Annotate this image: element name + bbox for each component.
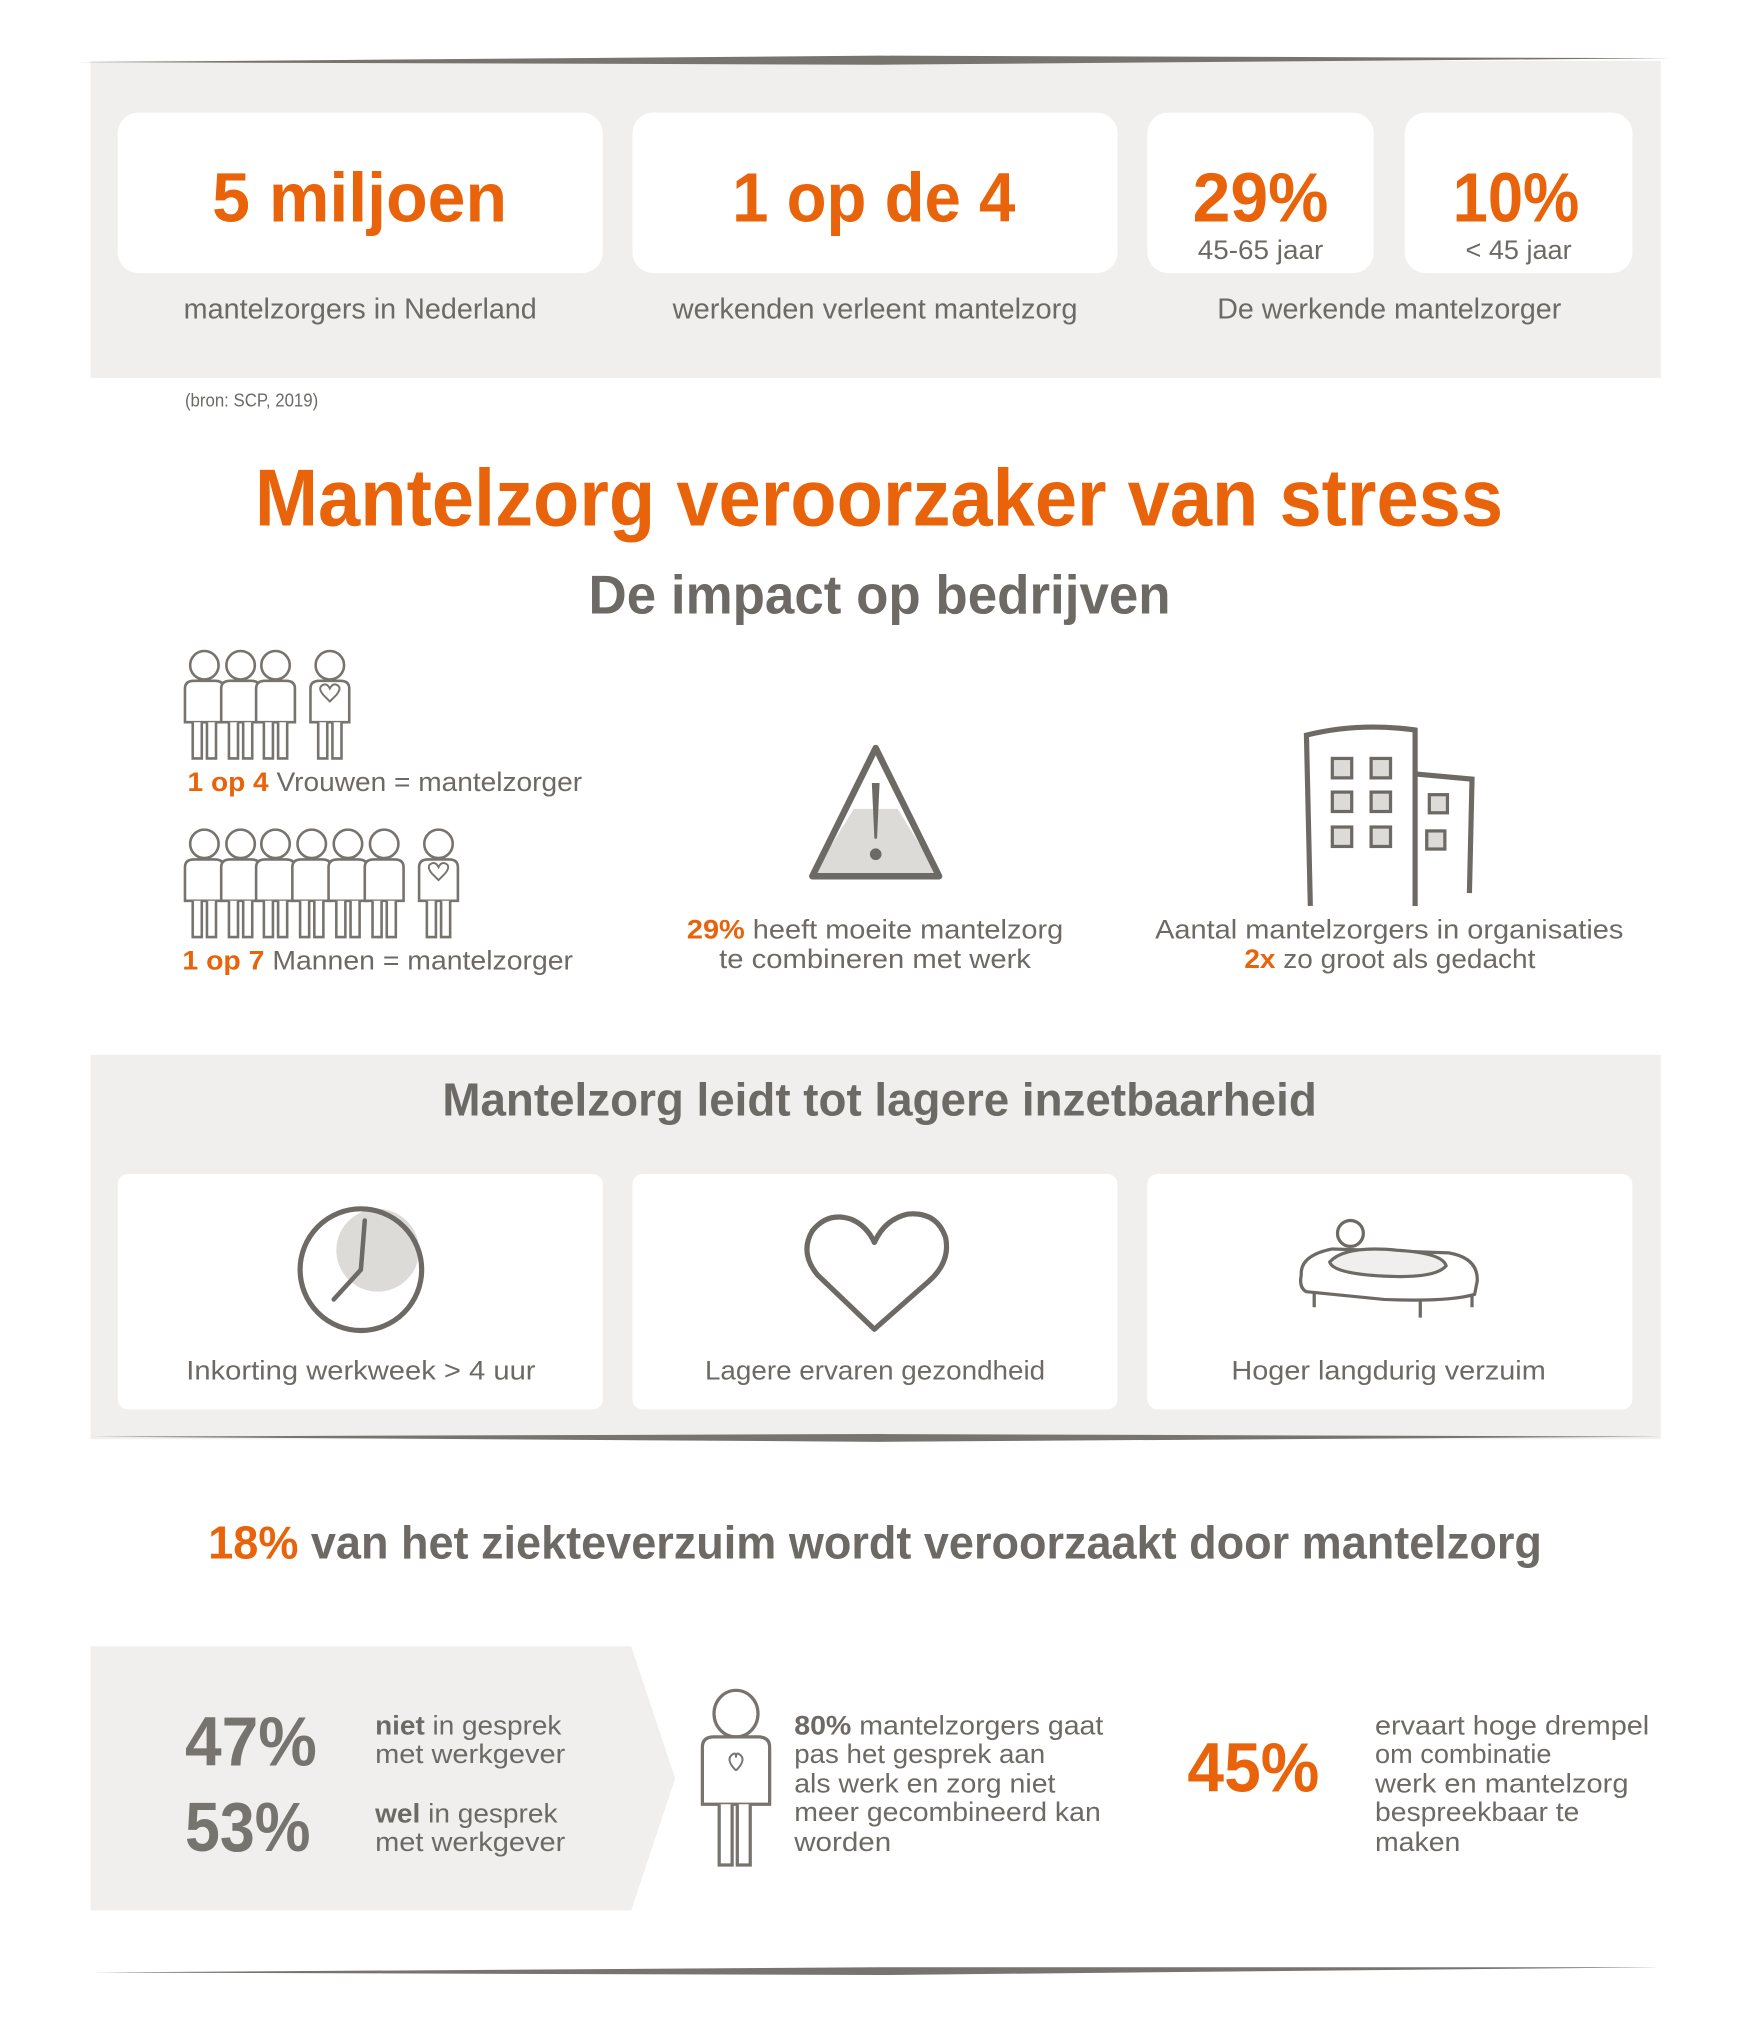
text: drempel: maken bbox=[1375, 1826, 1460, 1857]
panel: gesprek met werkgever: niet in gesprek bbox=[375, 1709, 562, 1740]
icon: person with heart bbox=[702, 1690, 770, 1865]
card: 5 miljoen bbox=[118, 113, 603, 273]
captions: mantelzorgers in Nederland bbox=[184, 293, 537, 325]
text: drempel: werk en mantelzorg bbox=[1374, 1768, 1629, 1799]
women group bbox=[185, 651, 582, 797]
card: 1 op de 4: 1 op de 4 bbox=[732, 158, 1016, 236]
card: 5 miljoen: 5 miljoen bbox=[212, 158, 507, 236]
captions: werkenden verleent mantelzorg bbox=[672, 293, 1077, 325]
card: 29%: 45-65 jaar bbox=[1198, 234, 1323, 265]
card: 1 op de 4 bbox=[633, 113, 1118, 273]
card: 10%: < 45 jaar bbox=[1466, 234, 1572, 265]
icon: warning triangle bbox=[812, 748, 939, 876]
card: gezondheid: Lagere ervaren gezondheid bbox=[705, 1355, 1045, 1386]
panel: gesprek met werkgever bbox=[91, 1646, 675, 1910]
text: 29% moeite bbox=[687, 913, 1063, 974]
text: drempel: om combinatie bbox=[1375, 1738, 1552, 1769]
card: 29% bbox=[1147, 113, 1374, 273]
source note: (bron: SCP, 2019) bbox=[185, 390, 318, 410]
text: 80% mantelzorgers: als werk en zorg niet bbox=[794, 1768, 1056, 1799]
panel: key figures bbox=[78, 56, 1671, 378]
panel: gesprek met werkgever: met werkgever bbox=[375, 1826, 565, 1857]
text: drempel: bespreekbaar te bbox=[1375, 1796, 1579, 1827]
card: werkweek bbox=[118, 1174, 603, 1409]
captions bbox=[184, 293, 1561, 325]
subtitle: De impact op bedrijven bbox=[589, 564, 1171, 625]
captions: De werkende mantelzorger bbox=[1217, 293, 1561, 325]
headline: 18% ziekteverzuim: 18% van het ziekteverzuim wordt veroorzaakt door mantelzorg bbox=[208, 1516, 1542, 1568]
card: werkweek: Inkorting werkweek > 4 uur bbox=[186, 1355, 536, 1386]
heading: Mantelzorg leidt tot lagere inzetbaarheid bbox=[442, 1074, 1317, 1126]
text: aantal mantelzorgers bbox=[1155, 913, 1623, 974]
text: 80% mantelzorgers: 80% mantelzorgers gaat bbox=[794, 1709, 1104, 1740]
title: Mantelzorg veroorzaker van stress bbox=[255, 452, 1503, 542]
card: 29%: 29% bbox=[1193, 158, 1328, 236]
text: 80% mantelzorgers: pas het gesprek aan bbox=[794, 1738, 1045, 1769]
card: verzuim: Hoger langdurig verzuim bbox=[1231, 1355, 1546, 1386]
text: drempel: ervaart hoge drempel bbox=[1375, 1709, 1649, 1740]
panel: gesprek met werkgever: 47% bbox=[185, 1702, 317, 1780]
panel: gesprek met werkgever: 53% bbox=[185, 1788, 310, 1866]
panel: gesprek met werkgever: wel in gesprek bbox=[374, 1797, 558, 1828]
text: aantal mantelzorgers: 2x zo groot als gedacht bbox=[1244, 943, 1536, 974]
text: aantal mantelzorgers: Aantal mantelzorgers in organisaties bbox=[1155, 913, 1623, 944]
text: 80% mantelzorgers: worden bbox=[793, 1826, 891, 1857]
men group: 1 op 7 Mannen = mantelzorger bbox=[182, 944, 573, 975]
text: 29% moeite: 29% heeft moeite mantelzorg bbox=[687, 913, 1063, 944]
card: gezondheid bbox=[633, 1174, 1118, 1409]
women group: 1 op 4 Vrouwen = mantelzorger bbox=[188, 766, 582, 797]
men group bbox=[182, 830, 573, 975]
icon: building bbox=[1306, 727, 1472, 906]
card: verzuim bbox=[1147, 1174, 1632, 1409]
panel: lagere inzetbaarheid bbox=[91, 1055, 1661, 1442]
text: drempel bbox=[1374, 1709, 1649, 1857]
card: 10%: 10% bbox=[1453, 158, 1579, 236]
panel: gesprek met werkgever: met werkgever bbox=[375, 1738, 565, 1769]
card: 10% bbox=[1405, 113, 1632, 273]
stat: 45%: 45% bbox=[1187, 1728, 1319, 1806]
text: 80% mantelzorgers: meer gecombineerd kan bbox=[794, 1796, 1101, 1827]
text: 80% mantelzorgers bbox=[793, 1709, 1104, 1857]
text: 29% moeite: te combineren met werk bbox=[719, 943, 1031, 974]
